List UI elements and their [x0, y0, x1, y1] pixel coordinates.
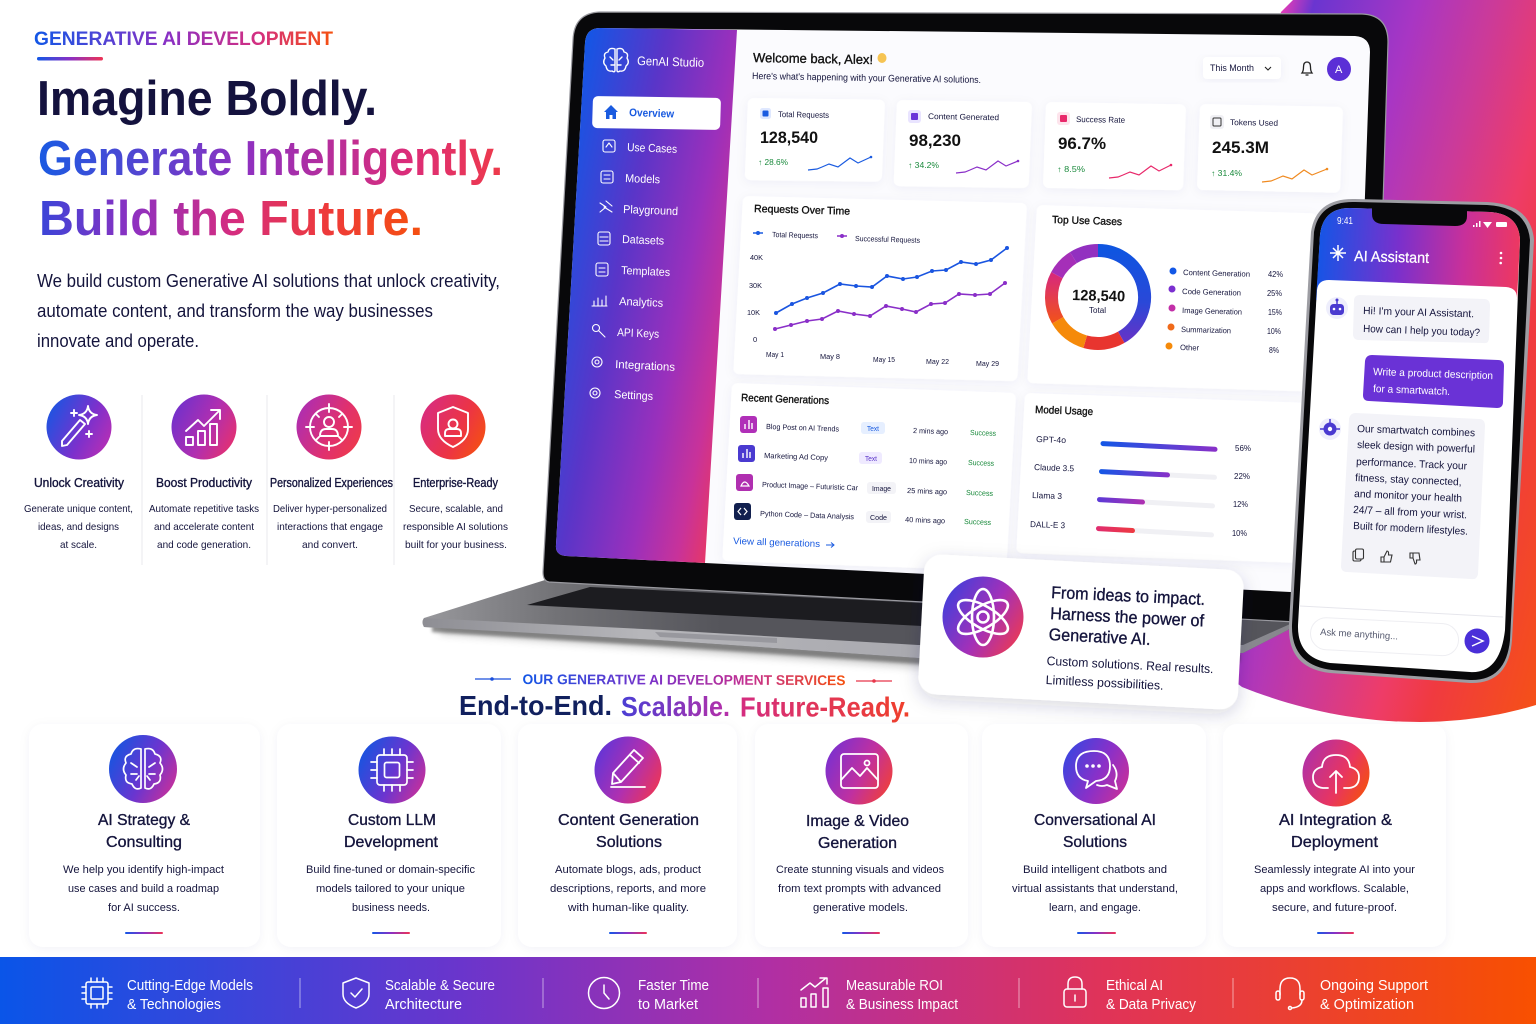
- nav active item: overview: Overview: [629, 107, 675, 121]
- footer band: [0, 957, 1536, 1024]
- feature: enterprise-ready: Secure, scalable, and: [409, 503, 503, 515]
- line chart: May 1: [766, 350, 784, 359]
- feature: enterprise-ready: built for your business.: [405, 539, 507, 551]
- chat bubble: response: 24/7 – all from your wrist.: [1353, 504, 1467, 521]
- service card: content generation: Automate blogs, ads, product: [555, 864, 701, 876]
- service card: content generation: Content Generation: [558, 812, 699, 829]
- benefit: ROI: Measurable ROI: [846, 978, 943, 994]
- service card: custom LLM: Build fine-tuned or domain-specific: [306, 864, 475, 876]
- bot avatar: [1326, 297, 1348, 319]
- welcome header: [752, 50, 981, 86]
- donut legend: [1166, 268, 1283, 355]
- line chart: May 29: [976, 359, 999, 368]
- callout text: Limitless possibilities.: [1045, 673, 1164, 693]
- nav active item: overview: [592, 96, 721, 130]
- nav items: Use Cases: [627, 142, 678, 156]
- benefit: security: Architecture: [385, 997, 462, 1013]
- stat card: content generated: Content Generated: [928, 112, 1000, 122]
- chat bubble: response: sleek design with powerful: [1357, 439, 1475, 456]
- main headline: Generate Intelligently.: [38, 132, 503, 186]
- chat bubble: user prompt: [1363, 355, 1504, 408]
- line chart: 10K: [747, 308, 760, 317]
- service card: conversational AI: Build intelligent chatbots and: [1023, 864, 1167, 876]
- chat bubble: response: Built for modern lifestyles.: [1353, 520, 1468, 538]
- nav items: Datasets: [622, 234, 665, 248]
- benefit: speed: to Market: [638, 997, 698, 1013]
- donut legend: 15%: [1268, 308, 1282, 317]
- donut legend: Other: [1180, 343, 1200, 353]
- service card: image and video: [755, 724, 968, 947]
- table rows: Marketing Ad Copy: [764, 451, 828, 462]
- send button: [1464, 628, 1490, 654]
- nav items: Templates: [621, 265, 671, 279]
- notch: [1372, 206, 1467, 226]
- services headline: [459, 690, 910, 722]
- icon: brain: [124, 749, 162, 789]
- logo: GenAI Studio: [637, 54, 704, 70]
- table rows: Text: [865, 454, 878, 463]
- table rows: Code: [870, 513, 887, 522]
- service card: content generation: [518, 724, 737, 947]
- feature: unlock creativity: [24, 394, 133, 551]
- service card: image and video: Create stunning visuals and videos: [776, 864, 944, 876]
- callout text: Harness the power of: [1050, 604, 1205, 631]
- chat bubble: response: performance. Track your: [1356, 456, 1468, 472]
- chat bubble: user prompt: for a smartwatch.: [1373, 383, 1450, 398]
- chat bubble: greeting: How can I help you today?: [1363, 323, 1480, 339]
- feature: unlock creativity: ideas, and designs: [38, 521, 119, 533]
- benefit: ROI: & Business Impact: [846, 997, 958, 1013]
- service card: conversational AI: Solutions: [1063, 834, 1127, 851]
- chat bubble: greeting: [1353, 295, 1490, 343]
- notification bell: [1302, 62, 1312, 75]
- intro paragraph: We build custom Generative AI solutions that unlock creativity,: [37, 271, 500, 291]
- panel: recent generations: [722, 383, 1016, 571]
- panel: model usage: GPT-4o: [1036, 434, 1067, 445]
- panel: recent generations: Recent Generations: [741, 392, 829, 407]
- line chart: [747, 246, 1009, 368]
- line chart: 40K: [750, 253, 763, 262]
- intro paragraph: innovate and operate.: [37, 331, 199, 351]
- view all link: View all generations: [733, 536, 820, 550]
- service card: conversational AI: Conversational AI: [1034, 812, 1156, 829]
- service card: integration and deployment: Seamlessly integrate AI into your: [1254, 864, 1415, 876]
- benefit: support: [1276, 978, 1428, 1013]
- laptop bezel: [543, 12, 1388, 626]
- service card: integration and deployment: [1223, 724, 1446, 947]
- feature: personalized experiences: interactions that engage: [277, 521, 383, 533]
- intro paragraph: automate content, and transform the way businesses: [37, 301, 433, 321]
- callout card: [918, 554, 1244, 710]
- benefit: security: Scalable & Secure: [385, 978, 495, 994]
- service card: conversational AI: learn, and engage.: [1049, 902, 1141, 914]
- assistant title: AI Assistant: [1354, 248, 1430, 267]
- status icons: [1473, 221, 1507, 228]
- welcome header: Here's what's happening with your Generative AI solutions.: [752, 71, 981, 86]
- panel: top use cases: [1027, 205, 1317, 391]
- intro paragraph: [37, 271, 500, 351]
- service card: integration and deployment: secure, and future-proof.: [1272, 902, 1397, 914]
- donut legend: Summarization: [1181, 325, 1231, 335]
- panel: requests over time: [733, 196, 1027, 381]
- feature: boost productivity: Automate repetitive tasks: [149, 503, 259, 515]
- table rows: Success: [964, 517, 991, 527]
- callout text: Custom solutions. Real results.: [1046, 654, 1214, 676]
- donut chart: 128,540: [1072, 287, 1125, 305]
- nav items: API Keys: [617, 327, 660, 341]
- service card: AI strategy: We help you identify high-impact: [63, 864, 224, 876]
- chat bubble: greeting: Hi! I'm your AI Assistant.: [1363, 305, 1474, 320]
- stat card: tokens used: 245.3M: [1212, 139, 1269, 157]
- icon: cloud upload: [1313, 755, 1359, 793]
- line chart: May 8: [820, 352, 840, 361]
- service card: custom LLM: business needs.: [352, 902, 430, 914]
- service card: AI strategy: use cases and build a roadmap: [68, 883, 219, 895]
- service card: custom LLM: Development: [344, 834, 439, 851]
- feature: personalized experiences: Personalized Experiences: [270, 476, 393, 490]
- nav items: Settings: [614, 389, 654, 403]
- line chart: May 15: [873, 355, 895, 364]
- feature: boost productivity: and code generation.: [157, 539, 251, 551]
- chart legend: Successful Requests: [855, 234, 920, 245]
- stat card: success rate: [1043, 102, 1186, 190]
- assistant title: [1330, 245, 1502, 267]
- stat card: success rate: ↑ 8.5%: [1057, 165, 1085, 174]
- donut chart: [1051, 250, 1145, 344]
- chat bubble: response: Our smartwatch combines: [1357, 423, 1475, 439]
- stat card: total requests: Total Requests: [778, 110, 829, 120]
- benefit: models: Cutting-Edge Models: [127, 978, 253, 994]
- phone header: [1316, 208, 1520, 300]
- table rows: 10 mins ago: [909, 456, 947, 466]
- line chart: 30K: [749, 281, 762, 290]
- icon: chat bubbles: [1076, 751, 1117, 789]
- feature: boost productivity: and accelerate content: [154, 521, 254, 533]
- feature: unlock creativity: at scale.: [60, 539, 97, 551]
- stat card: tokens used: ↑ 31.4%: [1211, 169, 1242, 178]
- panel: model usage: Claude 3.5: [1034, 462, 1075, 473]
- service card: custom LLM: [277, 724, 501, 947]
- table rows: Blog Post on AI Trends: [766, 422, 839, 434]
- keyboard: [527, 587, 1235, 640]
- main headline: [37, 72, 503, 246]
- table rows: Success: [968, 458, 994, 468]
- gradient background shape: [1180, 0, 1536, 722]
- chat input: [1310, 617, 1459, 656]
- benefit: privacy: & Data Privacy: [1106, 997, 1197, 1013]
- service card: AI strategy: [29, 724, 260, 947]
- logo: [604, 48, 704, 72]
- line chart: May 22: [926, 357, 949, 366]
- chat bubble: response: fitness, stay connected,: [1355, 472, 1462, 488]
- line chart: 0: [753, 335, 757, 344]
- table rows: Image: [872, 484, 891, 493]
- stat card: total requests: [745, 98, 885, 182]
- feature: unlock creativity: Unlock Creativity: [34, 476, 125, 490]
- stat card: total requests: 128,540: [760, 129, 818, 147]
- table rows: 25 mins ago: [907, 486, 947, 496]
- callout text: From ideas to impact.: [1051, 583, 1206, 609]
- stat card: tokens used: [1197, 104, 1343, 193]
- feature: enterprise-ready: responsible AI solutions: [403, 521, 508, 533]
- benefit: support: Ongoing Support: [1320, 978, 1428, 994]
- feature: enterprise-ready: Enterprise-Ready: [413, 476, 499, 490]
- stat card: success rate: Success Rate: [1076, 115, 1126, 125]
- panel: model usage: 12%: [1233, 499, 1248, 509]
- panel: model usage: [1016, 393, 1305, 563]
- benefit: speed: [588, 978, 709, 1013]
- service card: image and video: from text prompts with advanced: [778, 883, 941, 895]
- services headline: Future-Ready.: [740, 692, 910, 722]
- nav items: Integrations: [615, 359, 676, 374]
- table rows: [734, 416, 996, 527]
- chart legend: [753, 230, 920, 245]
- stat card: content generated: [894, 100, 1032, 188]
- phone screen: [1298, 206, 1520, 672]
- user avatar: [1327, 57, 1351, 81]
- panel: requests over time: Requests Over Time: [754, 203, 850, 218]
- donut legend: 25%: [1267, 289, 1282, 298]
- services eyebrow: OUR GENERATIVE AI DEVELOPMENT SERVICES: [522, 671, 846, 688]
- donut chart: Total: [1089, 306, 1106, 315]
- table rows: 40 mins ago: [905, 515, 945, 525]
- services headline: Scalable.: [621, 691, 730, 722]
- service card: AI strategy: AI Strategy &: [98, 812, 190, 829]
- callout text: [1045, 583, 1214, 693]
- icon: pencil: [611, 750, 645, 787]
- stat card: content generated: 98,230: [909, 132, 961, 150]
- icon: atom: [942, 576, 1024, 658]
- feature: boost productivity: Boost Productivity: [156, 476, 253, 490]
- benefit: ROI: [801, 978, 958, 1013]
- table rows: Success: [970, 428, 996, 438]
- panel: model usage: 10%: [1232, 528, 1247, 538]
- nav items: Models: [625, 173, 661, 186]
- chart legend: Total Requests: [772, 230, 818, 240]
- service card: conversational AI: [982, 724, 1206, 947]
- service card: conversational AI: virtual assistants that understand,: [1012, 883, 1178, 895]
- panel: model usage: 22%: [1234, 471, 1250, 481]
- benefit: models: & Technologies: [127, 997, 221, 1013]
- donut legend: 42%: [1268, 270, 1283, 279]
- benefit: speed: Faster Time: [638, 978, 709, 994]
- feature: personalized experiences: Deliver hyper-personalized: [273, 503, 387, 515]
- feature: boost productivity: [149, 394, 259, 551]
- benefit: models: [82, 978, 253, 1013]
- feedback icons: [1353, 549, 1420, 564]
- service card: custom LLM: Custom LLM: [348, 812, 436, 829]
- table rows: Success: [966, 488, 993, 498]
- feature: enterprise-ready: [403, 394, 508, 551]
- laptop base: [422, 580, 1300, 668]
- service card: image and video: Generation: [818, 835, 897, 852]
- table rows: 2 mins ago: [913, 426, 948, 436]
- chat bubble: response: [1341, 413, 1485, 579]
- panel: model usage: Llama 3: [1032, 490, 1063, 501]
- stat card: success rate: 96.7%: [1058, 135, 1106, 153]
- donut legend: Content Generation: [1183, 268, 1250, 279]
- sidebar: [556, 28, 737, 563]
- services headline: End-to-End.: [459, 690, 612, 721]
- service card: content generation: with human-like quality.: [567, 902, 689, 914]
- donut legend: Image Generation: [1182, 306, 1242, 317]
- table rows: Product Image – Futuristic Car: [762, 480, 859, 492]
- service card: content generation: Solutions: [596, 834, 662, 851]
- date filter: [1203, 57, 1281, 79]
- welcome header: Welcome back, Alex!: [753, 50, 873, 67]
- panel: top use cases: Top Use Cases: [1052, 214, 1122, 228]
- benefit: privacy: Ethical AI: [1106, 978, 1163, 994]
- stat card: tokens used: Tokens Used: [1230, 118, 1279, 128]
- service card: image and video: Image & Video: [806, 813, 909, 830]
- eyebrow heading: GENERATIVE AI DEVELOPMENT: [34, 29, 333, 50]
- stat card: total requests: ↑ 28.6%: [758, 158, 788, 167]
- service card: AI strategy: Consulting: [106, 834, 182, 851]
- benefit: security: [343, 978, 495, 1013]
- main headline: Build the Future.: [39, 192, 423, 246]
- feature: personalized experiences: [270, 394, 393, 551]
- donut legend: Code Generation: [1182, 287, 1241, 298]
- bot avatar: [1319, 418, 1341, 440]
- icon: image: [841, 754, 878, 788]
- chat bubble: response: and monitor your health: [1354, 488, 1462, 505]
- callout text: Generative AI.: [1048, 625, 1151, 649]
- panel: model usage: 56%: [1235, 443, 1251, 453]
- panel: model usage: Model Usage: [1035, 404, 1093, 418]
- benefit: privacy: [1064, 977, 1197, 1013]
- service card: custom LLM: models tailored to your unique: [316, 883, 465, 895]
- nav items: [590, 140, 678, 403]
- donut legend: 10%: [1267, 327, 1281, 336]
- feature: unlock creativity: Generate unique content,: [24, 503, 133, 515]
- service card: integration and deployment: apps and workflows. Scalable,: [1260, 883, 1409, 895]
- nav items: Analytics: [619, 296, 664, 310]
- date filter: This Month: [1210, 63, 1254, 73]
- stat card: content generated: ↑ 34.2%: [908, 161, 939, 170]
- donut legend: 8%: [1269, 346, 1279, 355]
- service card: image and video: generative models.: [813, 902, 908, 914]
- table rows: Python Code – Data Analysis: [760, 509, 854, 521]
- user avatar: A: [1335, 64, 1343, 76]
- panel: model usage: DALL-E 3: [1030, 519, 1066, 530]
- service card: integration and deployment: Deployment: [1291, 834, 1379, 851]
- chat input: Ask me anything...: [1320, 627, 1398, 642]
- service card: content generation: descriptions, reports, and more: [550, 883, 706, 895]
- service card: integration and deployment: AI Integration &: [1279, 812, 1392, 829]
- phone screen: 9:41: [1337, 216, 1353, 227]
- nav items: Playground: [623, 204, 678, 218]
- feature: personalized experiences: and convert.: [302, 539, 358, 551]
- eyebrow heading: [34, 29, 333, 60]
- icon: chip: [371, 749, 413, 791]
- table rows: Text: [867, 424, 880, 433]
- phone mockup: [1289, 199, 1534, 683]
- chat bubble: user prompt: Write a product description: [1373, 366, 1493, 382]
- main headline: Imagine Boldly.: [37, 72, 377, 126]
- benefit: support: & Optimization: [1320, 997, 1414, 1013]
- laptop screen: [556, 28, 1370, 595]
- service card: AI strategy: for AI success.: [108, 902, 180, 914]
